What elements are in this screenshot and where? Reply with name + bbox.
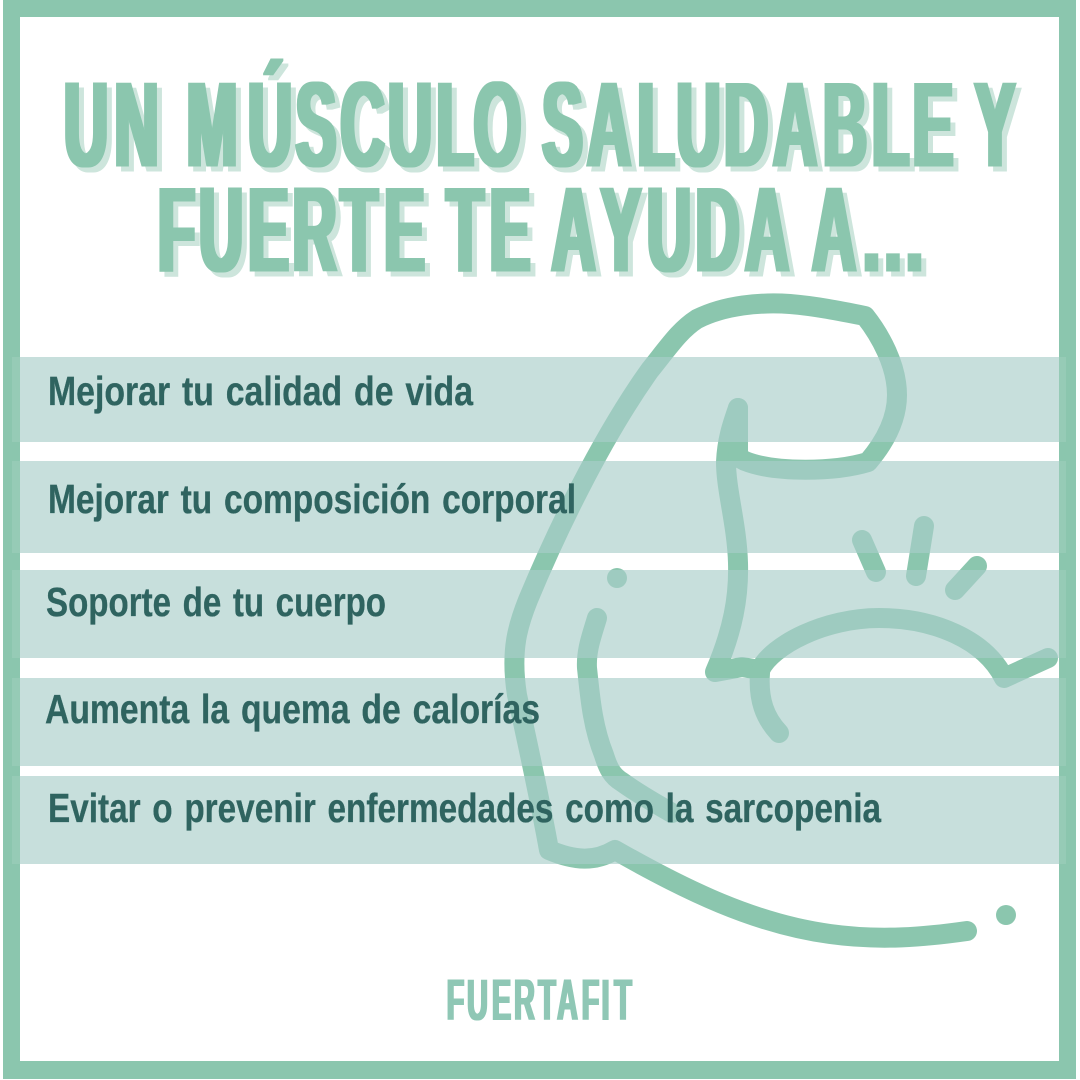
- benefit 3: Soporte de tu cuerpo: [46, 579, 386, 625]
- forearm arc: [760, 618, 1048, 678]
- flex ray middle: [916, 526, 924, 576]
- title shadow: [69, 63, 1020, 303]
- footer brand: FUERTAFIT: [447, 967, 632, 1033]
- title text: FUERTE TE AYUDA A...: [158, 163, 923, 298]
- benefit 4: Aumenta la quema de calorías: [45, 686, 540, 732]
- arm outer contour: [514, 303, 967, 938]
- flex ray left: [862, 540, 876, 572]
- inner arm line: [587, 618, 672, 813]
- biceps inner line: [715, 408, 760, 672]
- benefit 1: Mejorar tu calidad de vida: [48, 368, 474, 414]
- title text: [64, 58, 1015, 298]
- icon: flexed arm muscle: [514, 303, 1048, 938]
- title text: UN MÚSCULO SALUDABLE Y: [64, 58, 1015, 193]
- title shadow: UN MÚSCULO SALUDABLE Y: [69, 63, 1020, 198]
- benefit 5: Evitar o prevenir enfermedades como la sarcopenia: [48, 785, 882, 831]
- upper dot: [607, 568, 627, 588]
- benefit bands: [20, 357, 1059, 864]
- lower dot: [996, 905, 1016, 925]
- band overlap on frame: [12, 357, 1066, 864]
- title shadow: FUERTE TE AYUDA A...: [163, 168, 928, 303]
- biceps wedge: [728, 408, 748, 452]
- flex ray right: [955, 566, 977, 590]
- title: [64, 58, 1020, 303]
- benefit 2: Mejorar tu composición corporal: [48, 476, 576, 522]
- benefit list text: [45, 368, 882, 831]
- elbow tail: [760, 673, 779, 733]
